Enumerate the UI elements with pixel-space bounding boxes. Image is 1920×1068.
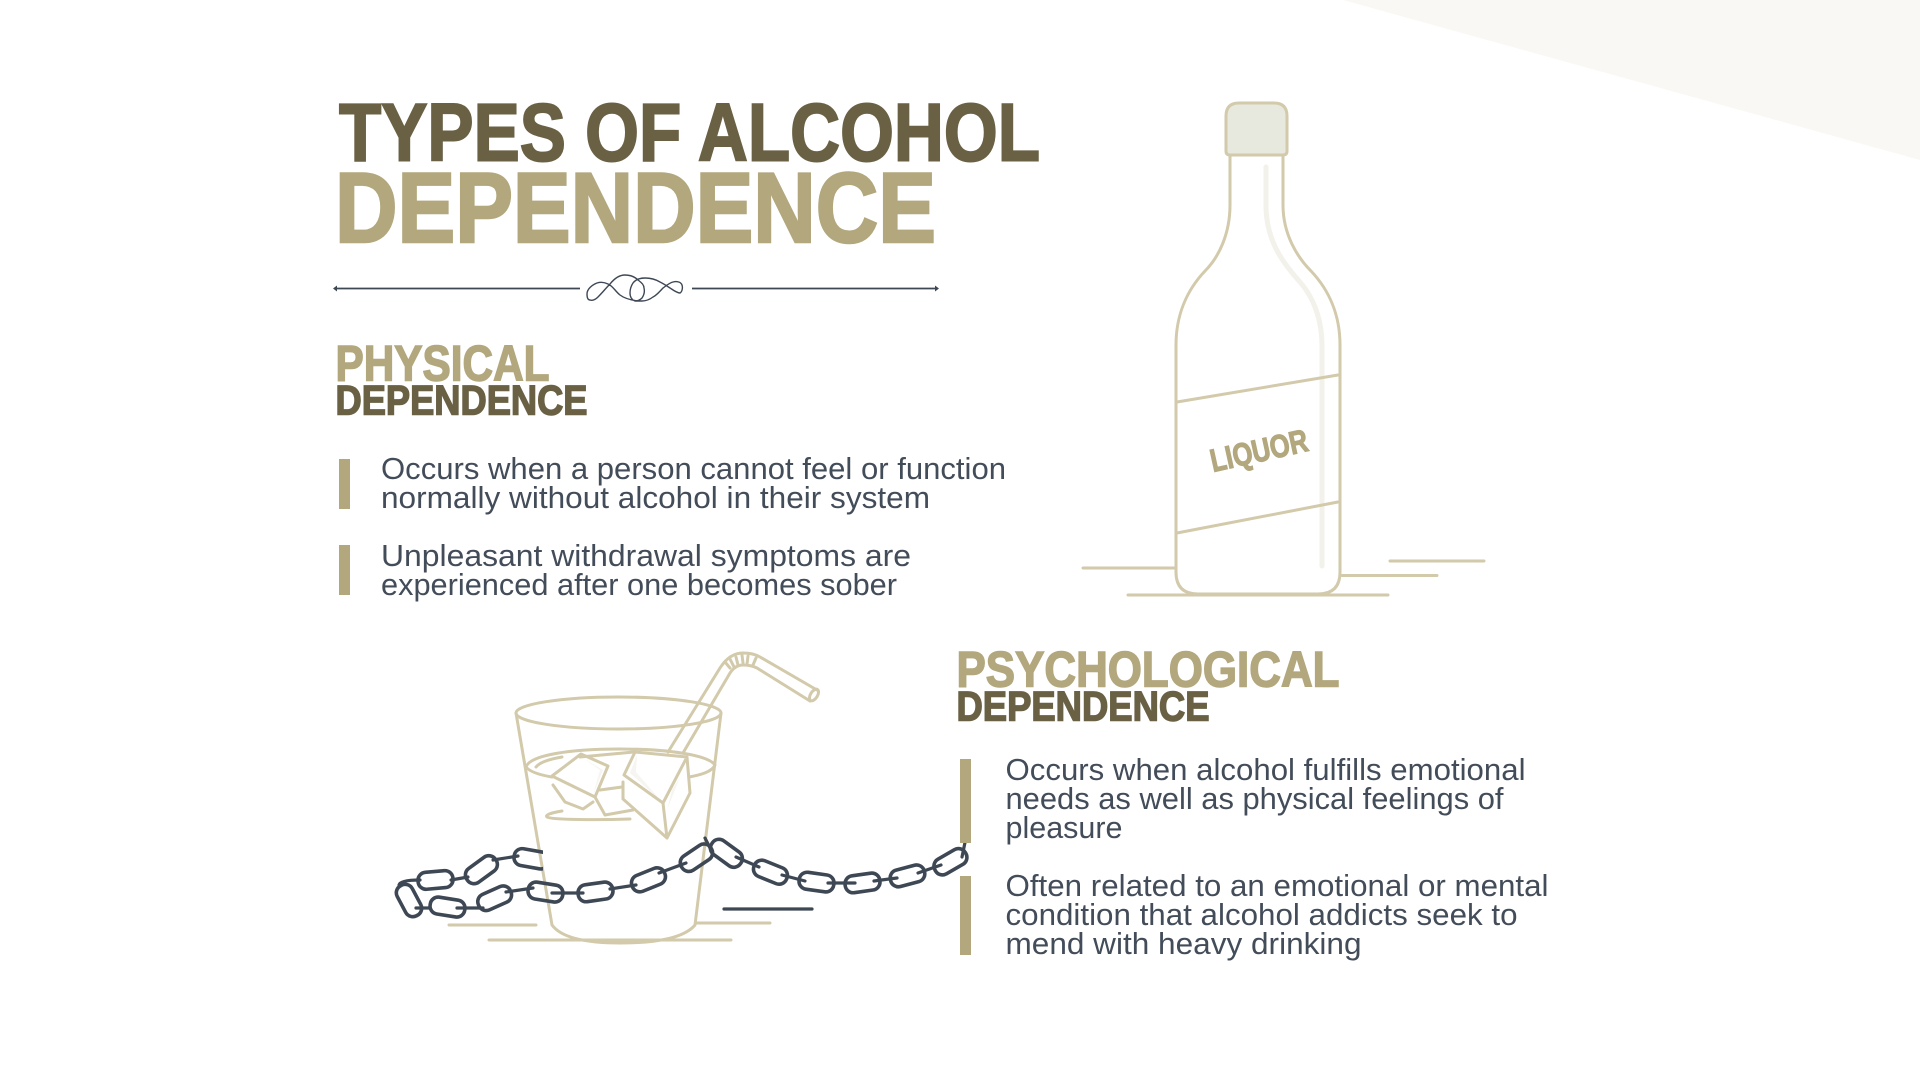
- bullet: physical point 2: experienced after one becomes sober: [381, 567, 897, 602]
- dark ground line: [724, 907, 812, 911]
- drinking straw: [668, 653, 820, 753]
- liquid surface: [526, 749, 715, 777]
- ornamental divider: [333, 275, 939, 301]
- bottle body: [1176, 156, 1340, 594]
- heading: psychological dependence: DEPENDENCE: [956, 682, 1210, 730]
- bullet: physical point 1: Occurs when a person cannot feel or function: [381, 451, 1006, 486]
- bullet: physical point 2: Unpleasant withdrawal symptoms are: [381, 538, 911, 573]
- bottle label text: LIQUOR: [1207, 422, 1311, 479]
- bullet: psychological point 1: needs as well as physical feelings of: [1006, 781, 1504, 816]
- bullet: psychological point 1: Occurs when alcohol fulfills emotional: [1006, 752, 1526, 787]
- title line 2: DEPENDENCE: [335, 152, 936, 263]
- panel: psychological dependence: [956, 642, 1548, 961]
- illustration: liquor bottle: [1083, 103, 1484, 595]
- chain: [394, 836, 970, 920]
- ground lines: [449, 923, 770, 940]
- bullet: physical point 1: normally without alcohol in their system: [381, 480, 930, 515]
- bottle highlight: [1266, 167, 1322, 566]
- illustration: glass in chains: [394, 653, 970, 943]
- heading: physical dependence: [336, 336, 588, 424]
- glass outline: [516, 697, 721, 943]
- heading: physical dependence: PHYSICAL: [336, 336, 550, 392]
- heading: physical dependence: DEPENDENCE: [336, 376, 588, 424]
- heading: psychological dependence: [956, 642, 1340, 730]
- bottle label lines: [1177, 375, 1338, 533]
- bullet: physical point 2: [339, 538, 911, 602]
- title: [335, 88, 1040, 263]
- corner background shape: [1343, 0, 1920, 160]
- bottle ground lines: [1083, 561, 1484, 595]
- bullet: psychological point 1: [960, 752, 1526, 845]
- bullet: psychological point 2: condition that alcohol addicts seek to: [1006, 897, 1518, 932]
- ice cubes: [536, 752, 690, 838]
- bullet: psychological point 1: pleasure: [1006, 810, 1122, 845]
- bullet: psychological point 2: Often related to an emotional or mental: [1006, 868, 1548, 903]
- panel: physical dependence: [336, 336, 1006, 602]
- bullet: psychological point 2: [960, 868, 1548, 961]
- bullet: psychological point 2: mend with heavy drinking: [1006, 926, 1362, 961]
- bottle cap: [1226, 103, 1287, 155]
- title line 1: TYPES OF ALCOHOL: [339, 88, 1040, 178]
- heading: psychological dependence: PSYCHOLOGICAL: [956, 642, 1340, 698]
- bullet: physical point 1: [339, 451, 1006, 515]
